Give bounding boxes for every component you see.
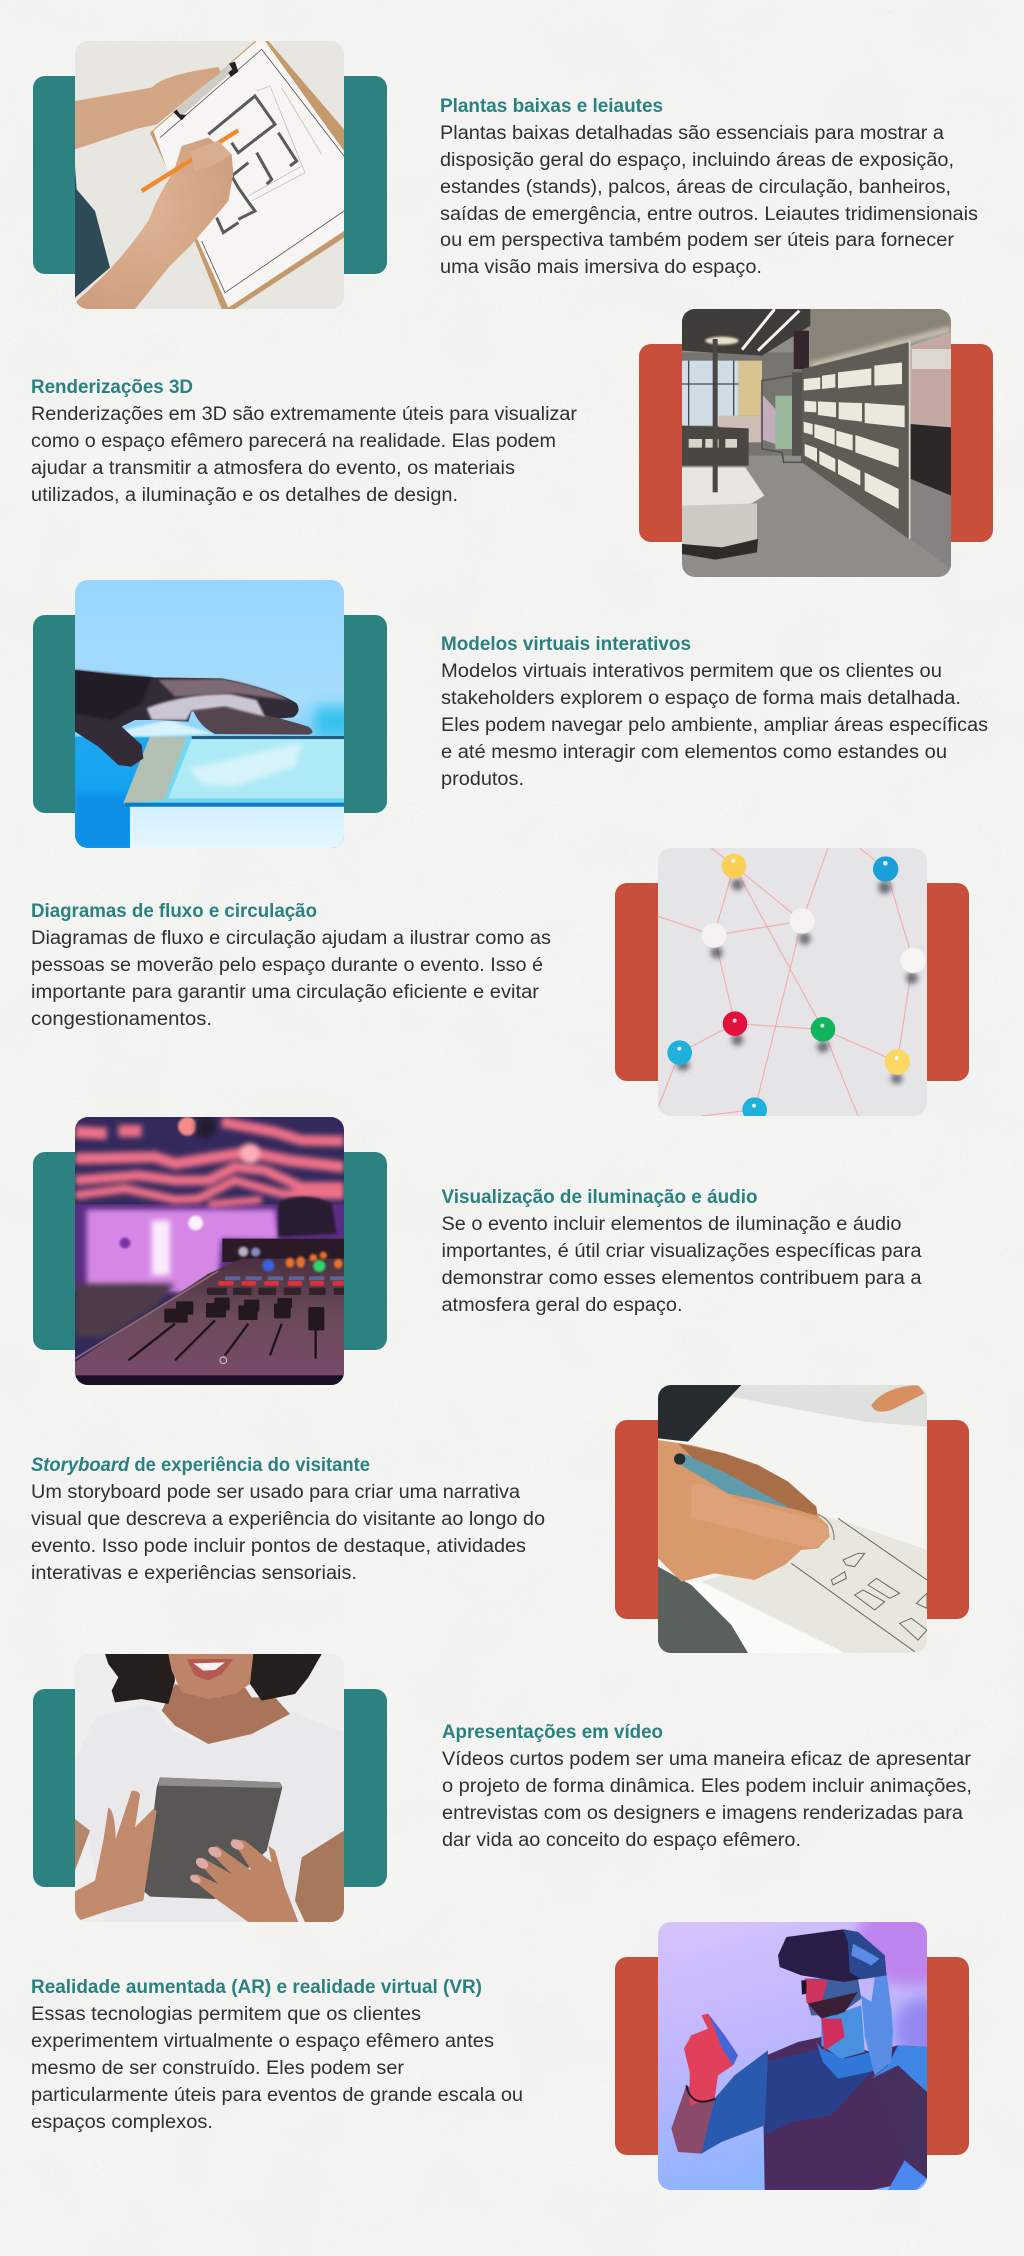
body text: disposição geral do espaço, incluindo áreas de exposição, bbox=[440, 150, 954, 171]
body text: como o espaço efêmero parecerá na realidade. Elas podem bbox=[31, 431, 556, 452]
accent panel: teal bbox=[33, 1152, 387, 1350]
body text bbox=[441, 661, 988, 790]
text block bbox=[31, 901, 551, 1030]
body text: stakeholders explorem o espaço de forma mais detalhada. bbox=[441, 688, 961, 709]
photo: hands drawing a floor plan on a clipboard bbox=[75, 41, 344, 309]
section 8: Realidade aumentada e realidade virtual bbox=[31, 1899, 969, 2190]
section 5: Visualização de iluminação e áudio bbox=[33, 1115, 922, 1385]
body text: congestionamentos. bbox=[31, 1009, 212, 1030]
text block bbox=[441, 634, 988, 790]
body text: estandes (stands), palcos, áreas de circulação, banheiros, bbox=[440, 177, 951, 198]
body text: evento. Isso pode incluir pontos de destaque, atividades bbox=[31, 1536, 526, 1557]
photo: audio mixing console with stage lights bbox=[75, 1115, 344, 1385]
body text: entrevistas com os designers e imagens renderizadas para bbox=[442, 1803, 963, 1824]
accent panel: teal bbox=[33, 615, 387, 813]
section 1: Plantas baixas e leiautes bbox=[33, 41, 978, 309]
body text: Um storyboard pode ser usado para criar uma narrativa bbox=[31, 1482, 520, 1503]
text block bbox=[31, 377, 578, 506]
body text: Vídeos curtos podem ser uma maneira eficaz de apresentar bbox=[442, 1749, 972, 1770]
body text: Se o evento incluir elementos de iluminação e áudio bbox=[442, 1214, 902, 1235]
body text: Eles podem navegar pelo ambiente, ampliar áreas específicas bbox=[441, 715, 988, 736]
body text: interativas e experiências sensoriais. bbox=[31, 1563, 357, 1584]
body text bbox=[31, 2004, 523, 2133]
photo: hand over a glowing touch screen bbox=[75, 580, 355, 850]
body text: demonstrar como esses elementos contribuem para a bbox=[442, 1268, 922, 1289]
heading: Renderizações 3D bbox=[31, 377, 193, 398]
body text: ou em perspectiva também podem ser úteis para fornecer bbox=[440, 230, 955, 251]
section 7: Apresentações em vídeo bbox=[33, 1654, 972, 1922]
accent panel: red bbox=[615, 883, 969, 1081]
body text: uma visão mais imersiva do espaço. bbox=[440, 257, 762, 278]
accent panel: teal bbox=[33, 76, 387, 274]
accent panel: teal bbox=[33, 1689, 387, 1887]
heading: Visualização de iluminação e áudio bbox=[442, 1187, 758, 1208]
section 4: Diagramas de fluxo e circulação bbox=[31, 848, 969, 1122]
body text: saídas de emergência, entre outros. Leiautes tridimensionais bbox=[440, 204, 978, 225]
text block bbox=[31, 1977, 523, 2133]
accent panel: red bbox=[615, 1957, 969, 2155]
photo: man wearing a VR headset in neon light bbox=[658, 1922, 927, 2190]
body text: visual que descreva a experiência do visitante ao longo do bbox=[31, 1509, 545, 1530]
body text: ajudar a transmitir a atmosfera do evento, os materiais bbox=[31, 458, 515, 479]
body text bbox=[31, 404, 578, 506]
body text: experimentem virtualmente o espaço efêmero antes bbox=[31, 2031, 494, 2052]
body text: importantes, é útil criar visualizações específicas para bbox=[442, 1241, 922, 1262]
body text bbox=[440, 123, 978, 278]
body text bbox=[442, 1214, 922, 1316]
heading: Plantas baixas e leiautes bbox=[440, 96, 663, 117]
heading: Modelos virtuais interativos bbox=[441, 634, 691, 655]
body text: pessoas se moverão pelo espaço durante o evento. Isso é bbox=[31, 955, 543, 976]
body text: Diagramas de fluxo e circulação ajudam a ilustrar como as bbox=[31, 928, 551, 949]
text block bbox=[442, 1187, 922, 1316]
body text: Essas tecnologias permitem que os clientes bbox=[31, 2004, 421, 2025]
photo: colored pins connected by threads bbox=[658, 848, 927, 1122]
body text: atmosfera geral do espaço. bbox=[442, 1295, 682, 1316]
text block bbox=[442, 1722, 972, 1851]
body text bbox=[442, 1749, 972, 1851]
body text: o projeto de forma dinâmica. Eles podem incluir animações, bbox=[442, 1776, 972, 1797]
body text bbox=[31, 1482, 545, 1584]
heading: Realidade aumentada (AR) e realidade virtual (VR) bbox=[31, 1977, 482, 1998]
body text: e até mesmo interagir com elementos como estandes ou bbox=[441, 742, 947, 763]
accent panel: red bbox=[639, 344, 993, 542]
body text: particularmente úteis para eventos de grande escala ou bbox=[31, 2085, 523, 2106]
heading: Apresentações em vídeo bbox=[442, 1722, 663, 1743]
body text: utilizados, a iluminação e os detalhes de design. bbox=[31, 485, 458, 506]
heading: Storyboard de experiência do visitante bbox=[31, 1455, 370, 1476]
body text: Plantas baixas detalhadas são essenciais para mostrar a bbox=[440, 123, 944, 144]
body text: Modelos virtuais interativos permitem que os clientes ou bbox=[441, 661, 942, 682]
body text: produtos. bbox=[441, 769, 524, 790]
text block bbox=[440, 96, 978, 278]
section 6: Storyboard de experiência do visitante bbox=[31, 1385, 969, 1653]
body text: espaços complexos. bbox=[31, 2112, 213, 2133]
body text: importante para garantir uma circulação eficiente e evitar bbox=[31, 982, 540, 1003]
section 2: Renderizações 3D bbox=[31, 309, 993, 577]
photo: woman holding a tablet bbox=[75, 1654, 344, 1922]
body text: Renderizações em 3D são extremamente úteis para visualizar bbox=[31, 404, 578, 425]
text block bbox=[31, 1455, 545, 1584]
section 3: Modelos virtuais interativos bbox=[33, 580, 988, 850]
body text: mesmo de ser construído. Eles podem ser bbox=[31, 2058, 405, 2079]
photo: 3D render of a corridor bbox=[682, 309, 951, 577]
body text bbox=[31, 928, 551, 1030]
body text: dar vida ao conceito do espaço efêmero. bbox=[442, 1830, 801, 1851]
photo: hand sketching a storyboard bbox=[658, 1385, 927, 1653]
heading: Diagramas de fluxo e circulação bbox=[31, 901, 317, 922]
accent panel: red bbox=[615, 1420, 969, 1619]
